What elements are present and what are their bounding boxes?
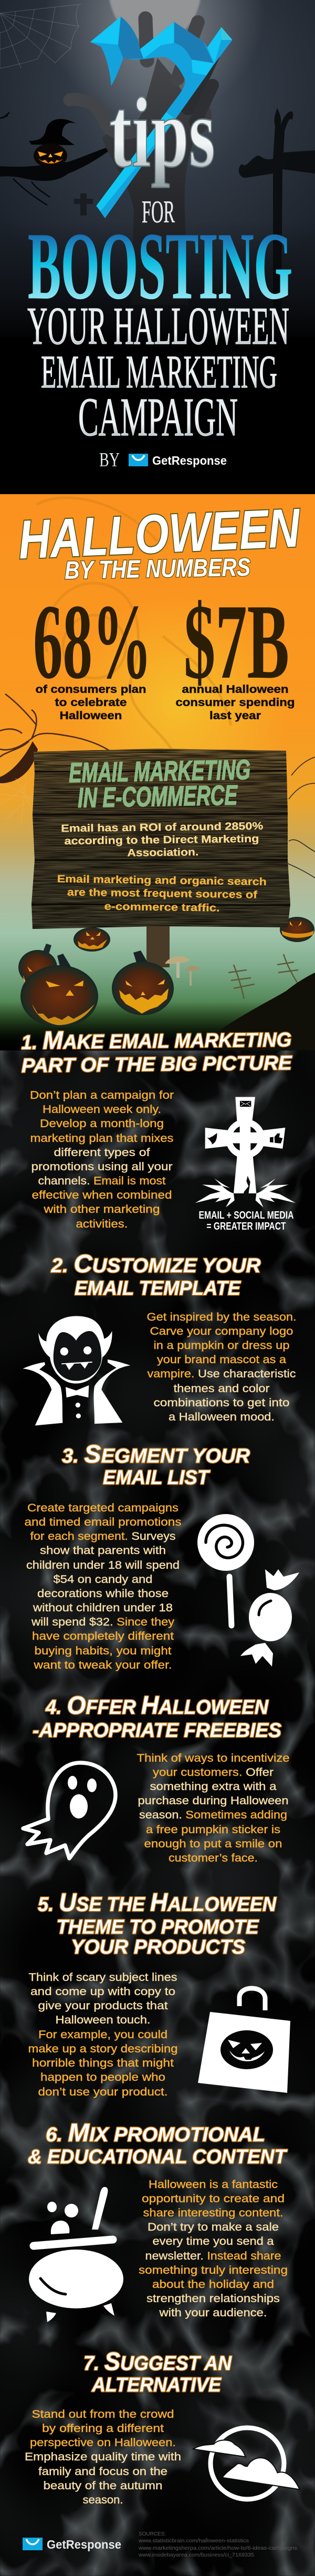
heading 1: 1. MAKE EMAIL MARKETING xyxy=(21,1024,292,1055)
body text 2: Carve your company logo xyxy=(150,1325,293,1337)
body text 6 xyxy=(139,2179,288,2319)
sign text: ROI: Association. xyxy=(127,846,198,859)
sources: www.insidebayarea.com/business/ci_7169335 xyxy=(138,2552,254,2558)
heading 1 xyxy=(21,1024,293,1077)
section 7: suggest an alternative xyxy=(25,2348,299,2506)
body text 1: effective when combined xyxy=(32,1189,172,1201)
sign text: traffic sources xyxy=(57,873,267,915)
heading 3: 3. SEGMENT YOUR xyxy=(62,1440,250,1468)
icon: vampire xyxy=(23,1316,130,1426)
heading 2: 2. CUSTOMIZE YOUR xyxy=(50,1250,261,1278)
heading 4: -APPROPRIATE FREEBIES xyxy=(33,1720,281,1742)
body text 6: something truly interesting xyxy=(139,2264,288,2276)
body text 6: Halloween is a fantastic xyxy=(149,2179,278,2191)
body text 5 xyxy=(28,1971,177,2098)
body text 4: season. Sometimes adding xyxy=(139,1809,287,1821)
panel: cobweb background xyxy=(0,1050,315,2576)
body text 7 xyxy=(25,2408,181,2506)
body text 7: season. xyxy=(83,2494,123,2506)
panel: wooden sign xyxy=(29,747,294,931)
heading 7: ALTERNATIVE xyxy=(91,2374,222,2396)
body text 7: Emphasize quality time with xyxy=(25,2451,181,2463)
mushrooms xyxy=(165,956,201,986)
by the numbers: BY THE NUMBERS xyxy=(65,554,250,585)
caption: email plus social media: = GREATER IMPACT xyxy=(207,1221,286,1232)
body text 1: Don’t plan a campaign for xyxy=(30,1089,174,1101)
body text 6: strengthen relationships xyxy=(146,2293,280,2305)
heading 1: PART OF THE BIG PICTURE xyxy=(22,1052,293,1077)
sign heading xyxy=(69,754,251,814)
section 2: customize your email template xyxy=(23,1250,296,1426)
icon: lollipop xyxy=(197,1514,254,1626)
moon xyxy=(109,0,201,42)
stat: 68 percent: to celebrate xyxy=(55,697,127,709)
pumpkin right xyxy=(280,917,314,942)
section 6: mix promotional and educational content xyxy=(28,2119,288,2322)
heading 6: & EDUCATIONAL CONTENT xyxy=(28,2146,288,2168)
dark ground xyxy=(0,1001,315,1050)
section 5: use the halloween theme to promote your products xyxy=(28,1889,290,2098)
heading 6 xyxy=(28,2119,288,2168)
heading 3 xyxy=(62,1440,250,1489)
body text 2: Get inspired by the season. xyxy=(147,1311,296,1323)
body text 3: decorations while those xyxy=(37,1588,169,1600)
body text 1: channels. Email is most xyxy=(38,1175,166,1187)
body text 1: activities. xyxy=(76,1218,128,1230)
body text 6: share interesting content. xyxy=(143,2207,284,2219)
sources: SOURCES: xyxy=(139,2531,166,2537)
icon: ghost xyxy=(23,1763,116,1858)
body text 6: Don’t try to make a sale xyxy=(148,2221,279,2233)
body text 3: buying habits, you might xyxy=(35,1645,172,1657)
body text 4 xyxy=(136,1752,290,1864)
body text 1: Develop a month-long xyxy=(40,1118,164,1130)
panel: halloween by the numbers background xyxy=(0,494,315,1050)
body text 1: promotions using all your xyxy=(32,1161,173,1173)
pumpkin floating xyxy=(74,927,110,952)
body text 4: customer’s face. xyxy=(169,1852,258,1864)
body text 4: a free pumpkin sticker is xyxy=(146,1824,280,1836)
body text 7: beauty of the autumn xyxy=(43,2480,163,2492)
pumpkin centre xyxy=(112,950,174,1015)
heading 3: EMAIL LIST xyxy=(103,1467,211,1489)
heading 7: 7. SUGGEST AN xyxy=(83,2348,232,2376)
heading 5: YOUR PRODUCTS xyxy=(71,1936,245,1958)
seven tips wordmark: tips xyxy=(109,78,215,188)
icon: wrapped candy xyxy=(240,1569,299,1667)
section 4: offer halloween-appropriate freebies xyxy=(23,1692,290,1864)
body text 2: in a pumpkin or dress up xyxy=(153,1340,290,1352)
sign text: traffic sources: are the most frequent sources of xyxy=(67,886,258,901)
body text 5: Think of scary subject lines xyxy=(28,1971,177,1984)
byline: BY xyxy=(99,449,120,471)
body text 7: perspective on Halloween. xyxy=(30,2437,176,2449)
stat: 7 billion dollars: last year xyxy=(209,710,261,722)
body text 3: have completely different xyxy=(32,1630,174,1642)
body text 2: a Halloween mood. xyxy=(169,1411,275,1423)
body text 3: Create targeted campaigns xyxy=(27,1502,178,1514)
body text 6: every time you send a xyxy=(152,2235,274,2247)
body text 2: themes and color xyxy=(173,1383,270,1395)
stat: 7 billion dollars: annual Halloween xyxy=(182,683,289,696)
heading 2: EMAIL TEMPLATE xyxy=(75,1277,242,1300)
body text 1: Halloween week only. xyxy=(43,1103,161,1116)
body text 7: Stand out from the crowd xyxy=(32,2408,174,2420)
heading 4: 4. OFFER HALLOWEEN xyxy=(45,1692,269,1720)
body text 3 xyxy=(24,1502,182,1671)
heading 6: 6. MIX PROMOTIONAL xyxy=(46,2119,265,2147)
planks xyxy=(29,747,294,931)
body text 3: for each segment. Surveys xyxy=(30,1530,175,1542)
icon: moon and clouds xyxy=(195,2428,299,2499)
body text 4: purchase during Halloween xyxy=(138,1795,289,1807)
tree branch xyxy=(0,143,121,181)
heading 5: THEME TO PROMOTE xyxy=(57,1916,259,1938)
spider web xyxy=(0,4,81,68)
scene: pumpkins in the meadow xyxy=(0,917,315,1050)
sign text: ROI xyxy=(61,821,264,860)
zombie hand xyxy=(70,18,213,305)
stat: 7 billion dollars: consumer spending xyxy=(175,697,295,709)
witch pumpkin xyxy=(29,119,76,168)
body text 1: with other marketing xyxy=(43,1203,160,1215)
section 3: segment your email list xyxy=(24,1440,299,1671)
body text 1: different types of xyxy=(54,1147,150,1159)
body text 5: don’t use your product. xyxy=(38,2086,168,2098)
heading 5: 5. USE THE HALLOWEEN xyxy=(38,1889,277,1917)
icon: cauldron xyxy=(29,2187,123,2322)
body text 2: combinations to get into xyxy=(153,1397,290,1409)
body text 6: newsletter. Instead share xyxy=(145,2250,281,2262)
sources: www.marketingsherpa.com/article/how-to/6-ideas-campaigns xyxy=(138,2545,297,2551)
icon: big blue numeral seven xyxy=(90,17,233,218)
heading 4 xyxy=(33,1692,281,1742)
body text 3: without children under 18 xyxy=(33,1602,173,1614)
caption: email plus social media xyxy=(198,1210,294,1232)
body text 3: children under 18 will spend xyxy=(26,1559,180,1571)
body text 2: vampire. Use characteristic xyxy=(147,1368,296,1380)
sign heading: IN E-COMMERCE xyxy=(78,780,238,814)
body text 6: with your audience. xyxy=(159,2307,267,2319)
logo: GetResponse footer: GetResponse xyxy=(47,2538,121,2551)
body text 3: want to tweak your offer. xyxy=(33,1659,172,1671)
heading: halloween by the numbers xyxy=(17,497,302,585)
body text 6: opportunity to create and xyxy=(142,2193,285,2205)
heading 7 xyxy=(83,2348,232,2396)
section 1: make email marketing part of the big picture xyxy=(21,1024,296,1232)
body text 3: $54 on candy and xyxy=(54,1573,152,1586)
tree root xyxy=(221,973,315,1050)
body text 1: marketing plan that mixes xyxy=(30,1132,173,1144)
pumpkin big xyxy=(20,954,98,1027)
small grave cross xyxy=(74,193,93,216)
body text 5: make up a story describing xyxy=(28,2043,177,2055)
stat: 68 percent: 68% xyxy=(33,582,152,701)
body text 5: happen to people who xyxy=(40,2071,165,2083)
icon: shopping bag with pumpkin xyxy=(198,1988,290,2093)
stat: 7 billion dollars xyxy=(175,582,295,722)
icon: celtic cross with roots xyxy=(195,1097,296,1208)
body text 4: enough to put a smile on xyxy=(144,1838,282,1850)
heading 5 xyxy=(38,1889,277,1958)
sign text: ROI: according to the Direct Marketing xyxy=(64,833,259,847)
body text 2 xyxy=(147,1311,296,1423)
body text 5: and come up with copy to xyxy=(30,1986,175,1998)
tree left xyxy=(0,694,113,757)
body text 5: give your products that xyxy=(38,2000,168,2012)
pumpkin back left xyxy=(18,944,57,985)
sign text: traffic sources: e-commerce traffic. xyxy=(104,901,220,914)
tree right xyxy=(273,757,315,878)
body text 1 xyxy=(30,1089,174,1230)
body text 2: your brand mascot as a xyxy=(157,1354,286,1366)
post xyxy=(146,920,170,967)
for: FOR xyxy=(142,195,175,229)
sign text: ROI: Email has an ROI of around 2850% xyxy=(61,821,264,834)
spider web left xyxy=(0,773,39,825)
stat: 68 percent: Halloween xyxy=(60,710,122,722)
body text 5: For example, you could xyxy=(38,2029,167,2041)
body text 6: about the holiday and xyxy=(152,2278,274,2291)
stat: 68 percent xyxy=(33,582,152,722)
iron cross silhouette xyxy=(239,108,315,336)
body text 3: show that parents with xyxy=(40,1545,166,1557)
logo: GetResponse: GetResponse xyxy=(152,454,227,467)
stat: 68 percent: of consumers plan xyxy=(36,683,146,696)
body text 7: by offering a different xyxy=(42,2422,164,2435)
body text 5: horrible things that might xyxy=(32,2057,174,2069)
body text 4: something extra with a xyxy=(150,1781,277,1793)
footer xyxy=(23,2531,297,2558)
ferns xyxy=(228,954,299,999)
sources: www.statisticbrain.com/halloween-statistics xyxy=(138,2538,249,2544)
panel: hero background xyxy=(0,0,315,494)
body text 4: Think of ways to incentivize xyxy=(136,1752,290,1764)
body text 3: and timed email promotions xyxy=(24,1516,182,1528)
sources xyxy=(138,2531,297,2558)
body text 7: family and focus on the xyxy=(38,2466,167,2478)
body text 5: Halloween touch. xyxy=(56,2014,150,2026)
title xyxy=(27,17,292,471)
body text 3: will spend $32. Since they xyxy=(31,1616,175,1628)
body text 4: your customers. Offer xyxy=(153,1766,274,1778)
sign text: traffic sources: Email marketing and organic search xyxy=(57,873,267,888)
heading 2 xyxy=(50,1250,261,1300)
